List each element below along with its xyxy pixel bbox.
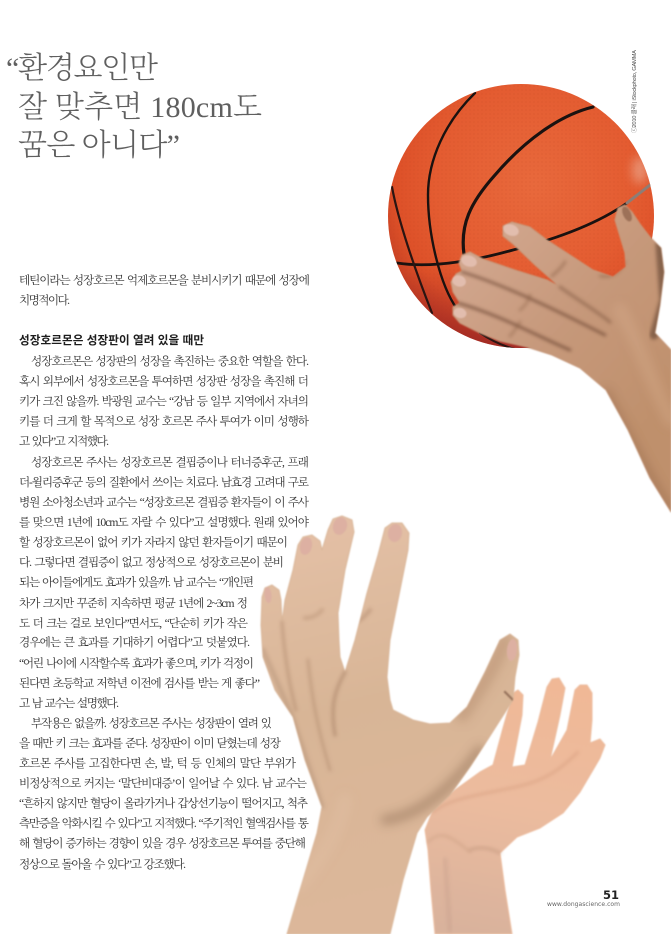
article body text: “어린 나이에 시작할수록 효과가 좋으며, 키가 걱정이: [19, 656, 254, 670]
page number and website: [547, 888, 620, 908]
intro text block: 치명적이다.: [19, 293, 70, 307]
title: 잘 맞추면 180cm도: [18, 91, 262, 124]
article body text: 차가 크지만 꾸준히 지속하면 평균 1년에 2~3cm 정: [19, 596, 248, 610]
article body text: 더-윌리증후군 등의 질환에서 쓰이는 치료다. 남효경 고려대 구로: [19, 475, 309, 489]
upper hand shading: [458, 245, 671, 512]
article body text: 경우에는 큰 효과를 기대하기 어렵다”고 덧붙였다.: [19, 635, 250, 649]
article body text: 병원 소아청소년과 교수는 “성장호르몬 결핍증 환자들이 이 주사: [19, 495, 310, 509]
article body text: 고 남 교수는 설명했다.: [19, 696, 119, 710]
article body text: 되는 아이들에게도 효과가 있을까. 남 교수는 “개인편: [19, 575, 254, 589]
article body text: 할 성장호르몬이 없어 키가 자라지 않던 환자들이기 때문이: [19, 535, 288, 549]
article body text: 부작용은 없을까. 성장호르몬 주사는 성장판이 열려 있: [31, 716, 272, 730]
section heading: 성장호르몬은 성장판이 열려 있을 때만: [19, 333, 204, 347]
article body text: 키를 더 크게 할 목적으로 성장 호르몬 주사 투여가 이미 성행하: [19, 414, 310, 428]
article body text: 비정상적으로 커지는 ‘말단비대증’이 일어날 수 있다. 남 교수는: [19, 776, 307, 790]
article body text: 측만증을 악화시킬 수 있다”고 지적했다. “주기적인 혈액검사를 통: [19, 816, 309, 830]
article body text: “흔하지 않지만 혈당이 올라가거나 갑상선기능이 떨어지고, 척추: [19, 796, 308, 810]
basketball: [388, 84, 654, 349]
article body text: [19, 354, 310, 871]
upper hand and forearm: [451, 205, 671, 512]
large hand shading: [262, 608, 514, 828]
article body text: 고 있다”고 지적했다.: [19, 434, 109, 448]
large hand fingernails: [264, 515, 518, 661]
article body text: 성장호르몬 주사는 성장호르몬 결핍증이나 터너증후군, 프래: [31, 455, 309, 469]
article body text: 성장호르몬은 성장판의 성장을 촉진하는 중요한 역할을 한다.: [31, 354, 309, 368]
illustration: basketball held by a hand: [388, 84, 671, 512]
intro text block: [19, 273, 310, 307]
article body text: 정상으로 돌아올 수 있다”고 강조했다.: [19, 857, 186, 871]
page number and website: 51: [603, 888, 619, 902]
title: “환경요인만: [6, 52, 158, 85]
title: [6, 52, 262, 162]
intro text block: 테틴이라는 성장호르몬 억제호르몬을 분비시키기 때문에 성장에: [19, 273, 310, 287]
article body text: 된다면 초등학교 저학년 이전에 검사를 받는 게 좋다”: [19, 676, 260, 690]
photo credit: ⓒ2010 클래 | iStockphoto, GAMMA: [630, 50, 638, 133]
article body text: 을 때만 키 크는 효과를 준다. 성장판이 이미 닫혔는데 성장: [19, 736, 282, 750]
illustration: large reaching hand: [261, 515, 519, 934]
upper hand fingernails: [451, 205, 634, 320]
article body text: 다. 그렇다면 결핍증이 없고 정상적으로 성장호르몬이 분비: [19, 555, 284, 569]
article body text: 키가 크진 않을까. 박광원 교수는 “강남 등 일부 지역에서 자녀의: [19, 394, 309, 408]
article body text: 를 맞으면 1년에 10cm도 자랄 수 있다”고 설명했다. 원래 있어야: [19, 515, 310, 529]
title: 꿈은 아니다”: [18, 129, 180, 162]
page number and website: www.dongascience.com: [547, 901, 620, 908]
illustration: back reaching hand: [425, 678, 605, 934]
article body text: 호르몬 주사를 고집한다면 손, 발, 턱 등 인체의 말단 부위가: [19, 756, 297, 770]
article body text: 해 혈당이 증가하는 경향이 있을 경우 성장호르몬 투여를 중단해: [19, 836, 306, 850]
article body text: 혹시 외부에서 성장호르몬을 투여하면 성장판 성장을 촉진해 더: [19, 374, 309, 388]
article body text: 도 더 크는 걸로 보인다”면서도, “단순히 키가 작은: [19, 616, 248, 630]
